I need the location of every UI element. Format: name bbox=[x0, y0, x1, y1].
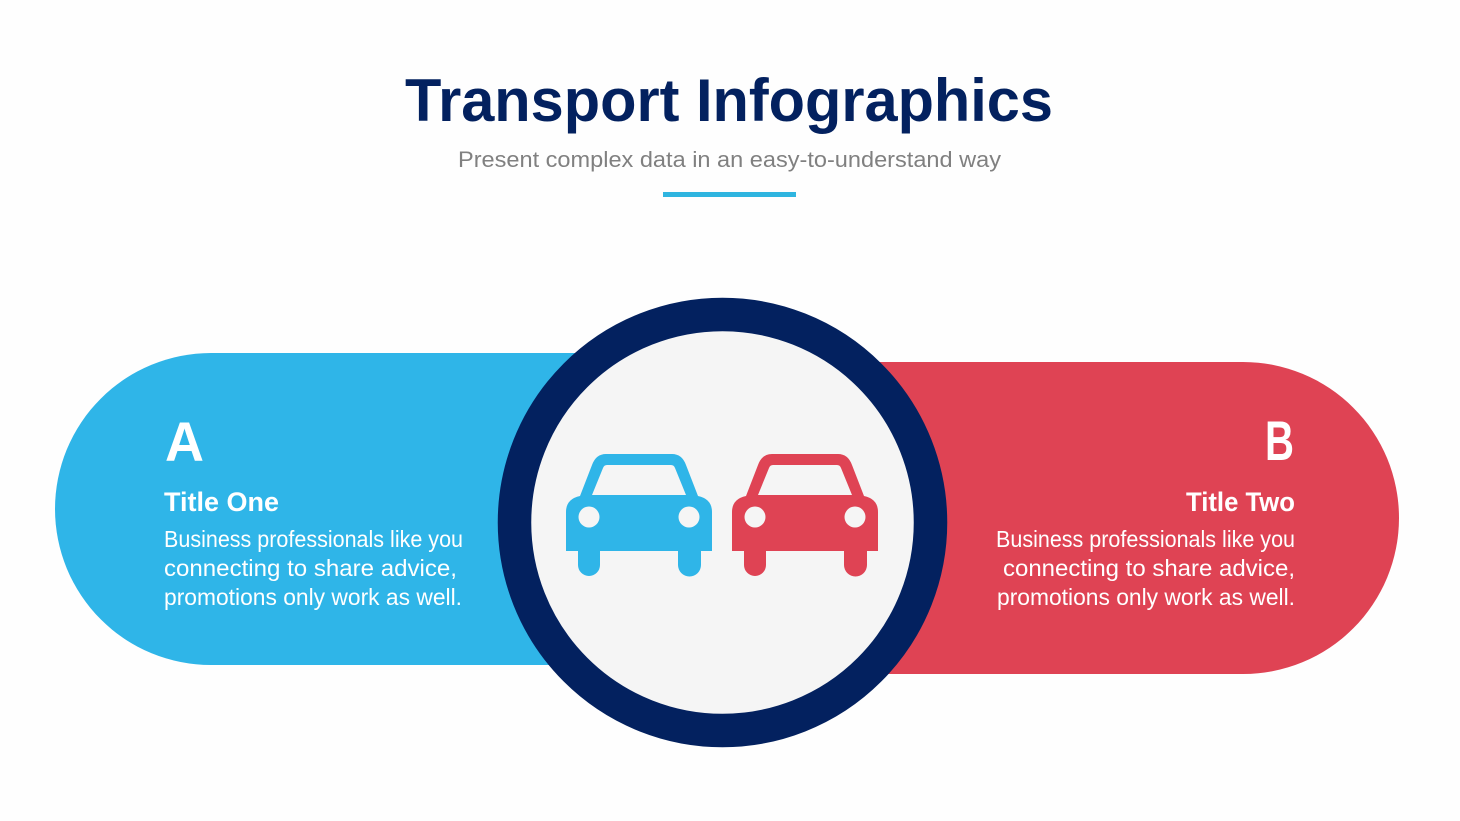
letter B: B bbox=[1265, 409, 1294, 472]
red pill shape bbox=[830, 362, 1399, 674]
body text B: connecting to share advice, bbox=[1003, 555, 1295, 581]
blue pill shape bbox=[55, 353, 620, 665]
panel: B red pill bbox=[830, 362, 1399, 674]
body text B bbox=[996, 526, 1295, 610]
body text A: promotions only work as well. bbox=[164, 584, 462, 610]
subtitle: Present complex data in an easy-to-understand way bbox=[458, 147, 1001, 172]
heading: Title One: Title One bbox=[164, 487, 279, 517]
title: Transport Infographics bbox=[405, 67, 1053, 134]
body text B: Business professionals like you bbox=[996, 526, 1295, 552]
body text A: Business professionals like you bbox=[164, 526, 463, 552]
panel: A blue pill bbox=[55, 353, 620, 665]
body text A: connecting to share advice, bbox=[164, 555, 457, 581]
center ring bbox=[514, 314, 930, 730]
title underline accent bbox=[663, 192, 796, 197]
heading: Title Two: Title Two bbox=[1186, 487, 1295, 517]
icon: red car bbox=[732, 454, 878, 576]
body text A bbox=[164, 526, 463, 610]
body text B: promotions only work as well. bbox=[997, 584, 1295, 610]
icon: blue car bbox=[566, 454, 712, 576]
letter A: A bbox=[165, 410, 204, 473]
